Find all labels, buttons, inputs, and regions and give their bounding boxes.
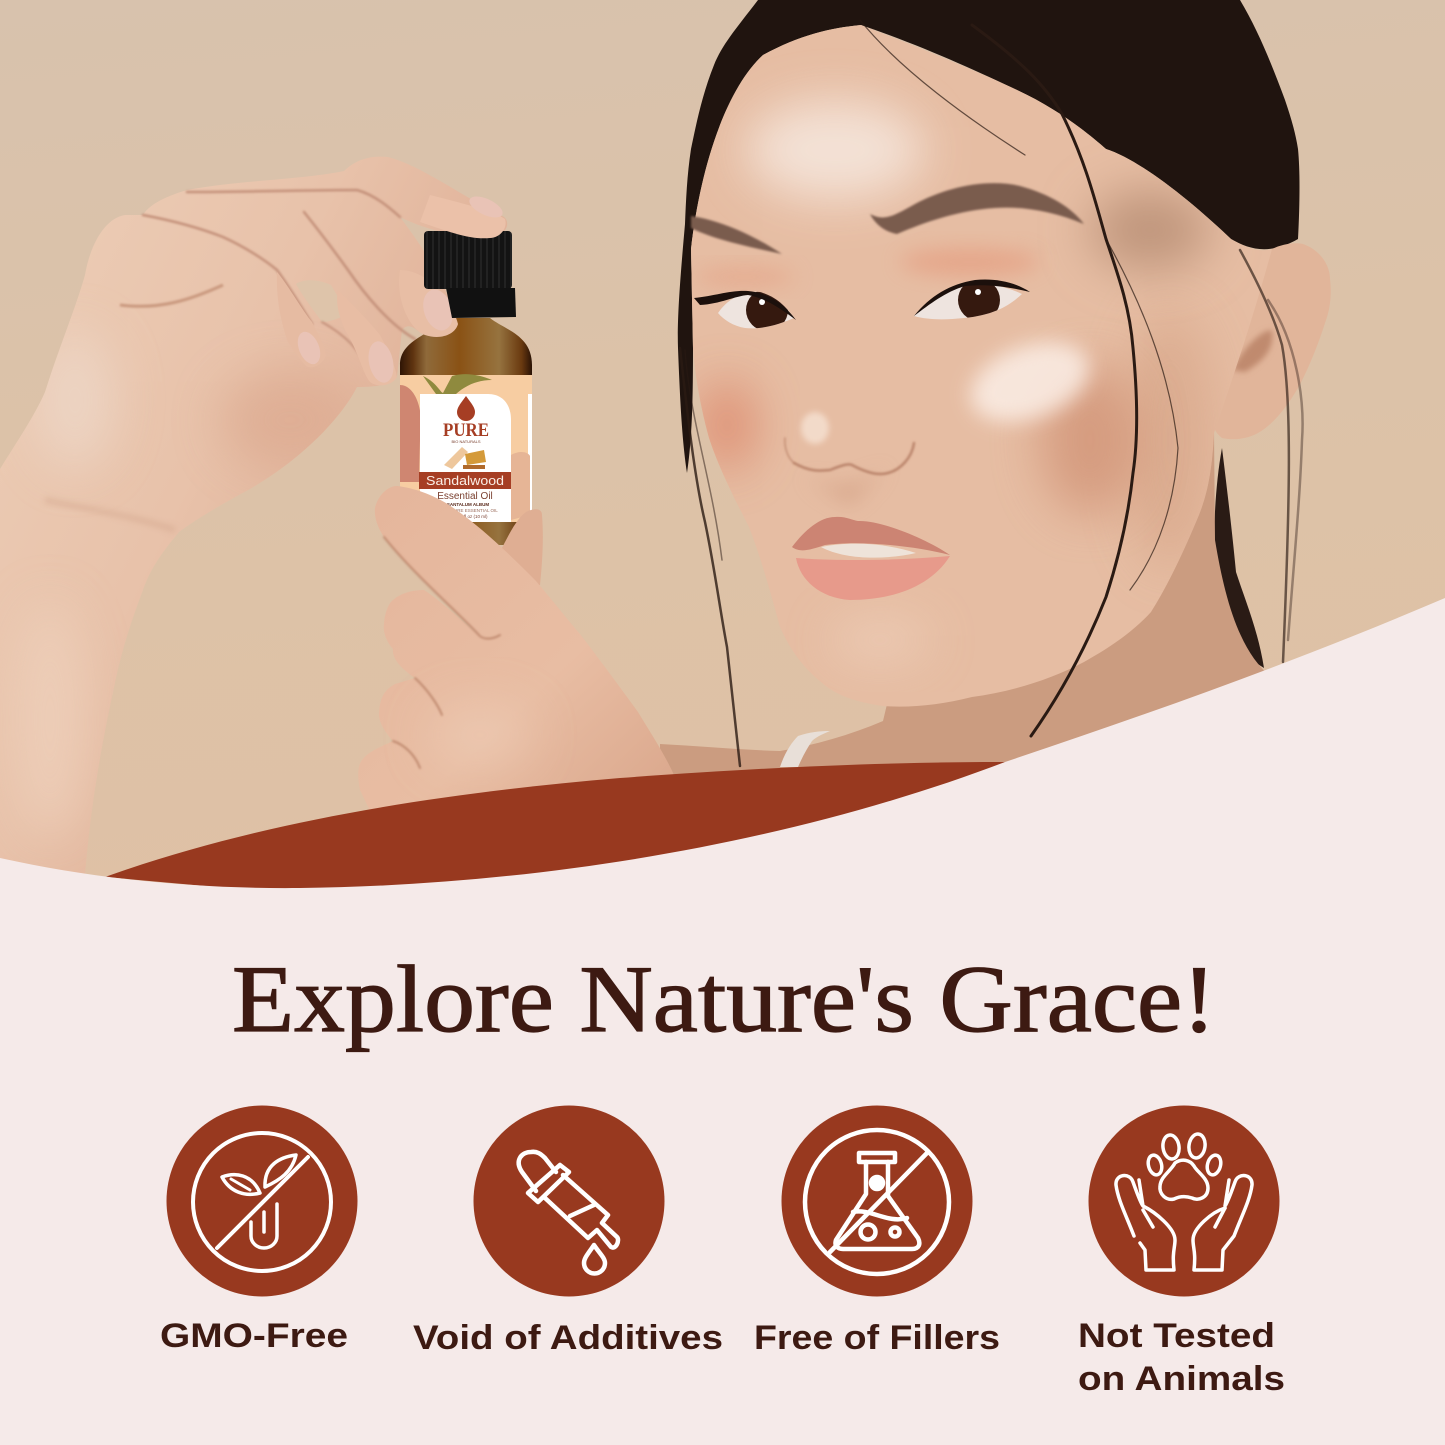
pink swatch [400,385,421,482]
textured wood swatch [511,452,530,520]
label: Not Tested [1078,1317,1275,1355]
name band [419,472,511,489]
badge circle [1088,1106,1280,1296]
fingernail on cap [466,192,506,222]
iris [746,292,788,328]
top strap [780,731,830,767]
bottle glass [400,318,532,545]
facial shading [695,100,1215,660]
iris [958,285,1000,318]
icon: crossed-out plant in test tube [193,1133,331,1271]
leaf [423,374,492,394]
lash line [914,280,1030,316]
red swoosh [105,762,1005,890]
ear [1212,243,1331,439]
bottle collar [446,288,516,318]
badge circle [782,1106,972,1296]
pinching fingertip [500,509,543,590]
feature: Not Tested on Animals [1078,1106,1285,1398]
neck and shoulders [660,430,1275,800]
icon: dropper [519,1152,618,1274]
size text: 100% PURE ESSENTIAL OIL [438,508,498,513]
hand silhouette [0,157,507,875]
right edge strip [528,394,532,512]
ponytail behind neck [1214,448,1264,668]
hand shading [15,285,360,840]
knuckle lines [384,537,500,768]
peach label [400,375,532,522]
latin name: SANTALUM ALBUM [447,502,489,507]
ring finger shape [337,290,397,385]
product name: Sandalwood [426,473,504,488]
essential oil text: Essential Oil [437,491,493,502]
label: Free of Fillers [754,1319,1000,1357]
third finger shape [277,272,326,367]
icon: crossed-out flask [805,1130,949,1274]
brand name: PURE [443,420,489,441]
lips [792,517,950,600]
bottle cap [424,231,512,289]
title: Explore Nature's Grace! [232,946,1216,1052]
badge circle [474,1106,664,1296]
hand holding bottle: upper [0,157,507,875]
product label [400,374,532,522]
gap between fingers [296,280,348,322]
volume text: 1/3 fl oz (10 ml) [456,514,488,519]
left eye [694,289,796,331]
white panel [420,394,511,522]
badge circle [166,1106,358,1296]
label: Void of Additives [413,1319,723,1357]
hair strands [680,20,1303,766]
eyebrows [691,183,1084,254]
fingertip over shoulder [399,270,458,337]
hair mass [678,0,1300,473]
label: GMO-Free [160,1317,348,1355]
fingernail [418,286,458,334]
nose [785,438,914,474]
woman portrait [660,0,1331,800]
face [691,25,1272,707]
brand subtitle: BIO NATURALS [451,439,481,444]
hand silhouette [358,486,674,815]
right eye [914,279,1030,321]
bottom panel with curved top [0,598,1445,1445]
background: photo backdrop [0,0,1445,900]
lower hand [358,486,674,815]
feature: GMO-Free [160,1106,358,1355]
fingertip over cap [420,195,506,238]
finger separation lines [143,190,415,367]
label: on Animals [1078,1360,1285,1398]
feature: Free of Fillers [754,1106,1000,1357]
hand highlight [430,705,530,765]
lash line [694,291,796,320]
fingernails [293,328,397,385]
feature: Void of Additives [413,1106,723,1357]
icon: paw in two hands [1116,1133,1252,1270]
sandalwood pieces [444,447,486,469]
drop logo [457,396,475,421]
ear shadow [1232,330,1272,372]
essential oil bottle [399,192,532,545]
